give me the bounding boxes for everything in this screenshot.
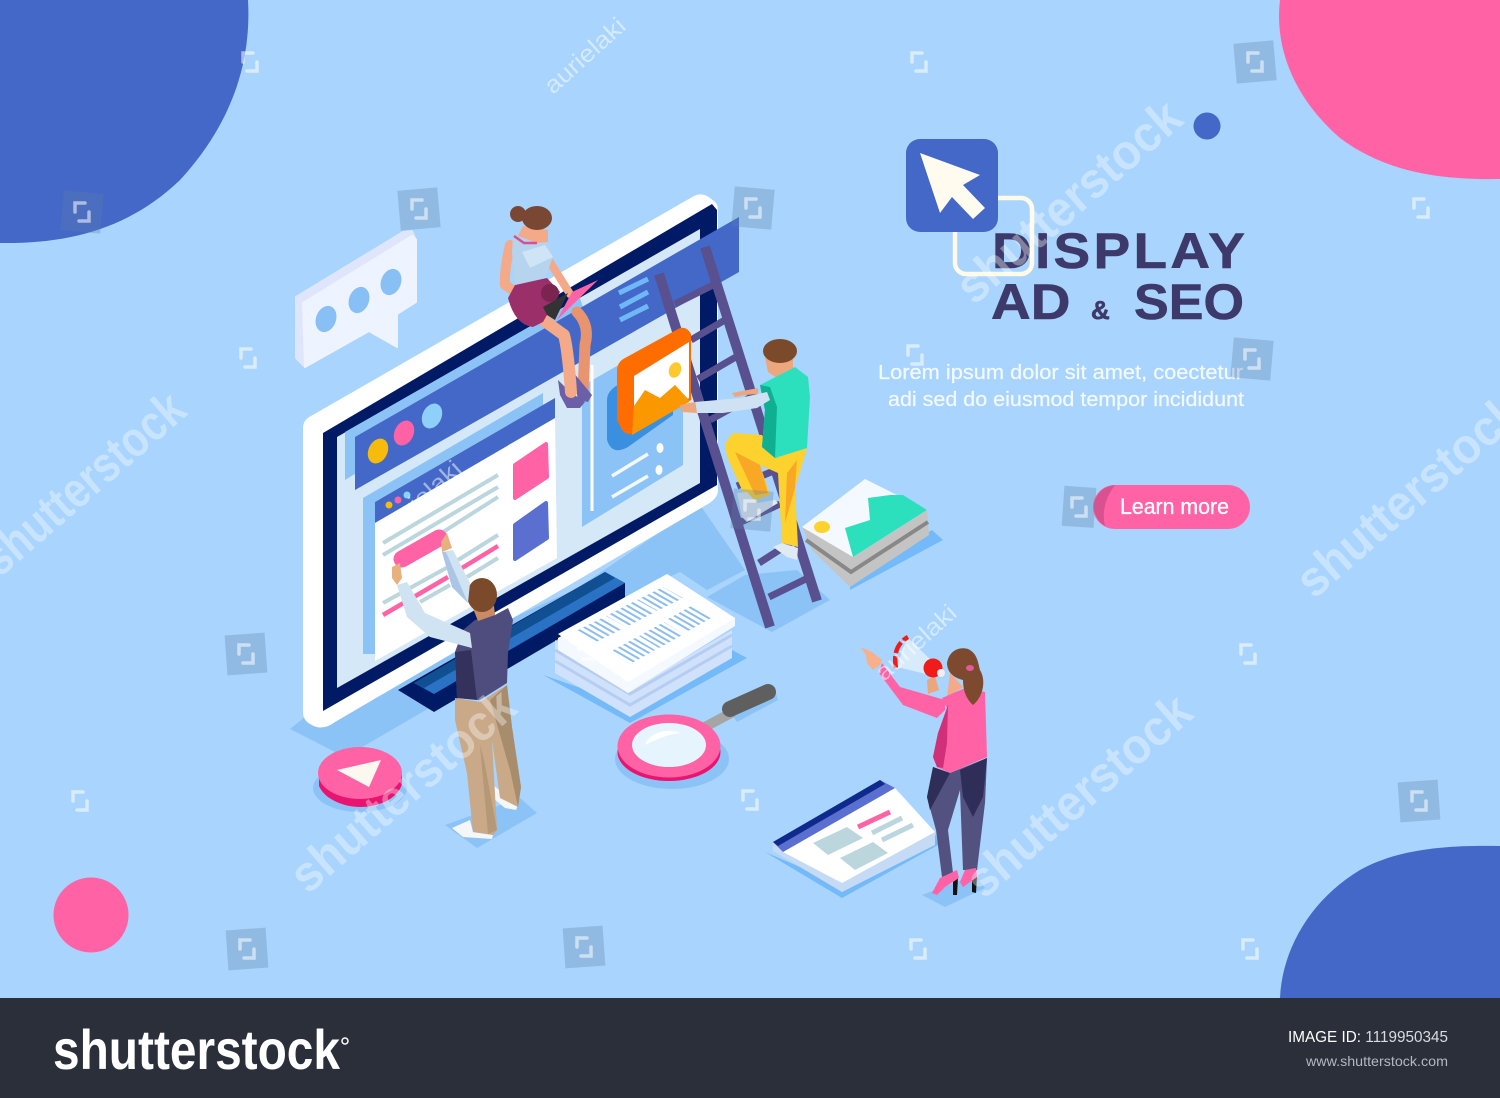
watermark text: aurielaki xyxy=(375,455,467,542)
vest xyxy=(455,608,513,700)
pink tile xyxy=(515,444,547,498)
dot: pink circle xyxy=(54,878,128,952)
arms xyxy=(397,582,472,648)
watermark text: aurielaki xyxy=(870,599,962,686)
figure: woman with megaphone xyxy=(860,637,987,895)
watermark text: shutterstock xyxy=(954,682,1203,908)
button: learn more: Learn more xyxy=(1120,494,1229,519)
title: AD xyxy=(991,274,1070,330)
monitor xyxy=(303,194,739,728)
side panel xyxy=(582,328,683,527)
trousers xyxy=(725,433,807,547)
outline square xyxy=(955,198,1032,274)
back leg xyxy=(577,312,586,392)
floor shadows xyxy=(290,505,985,907)
document stack xyxy=(555,574,735,717)
blue square xyxy=(906,139,998,232)
icon: cursor tile xyxy=(906,139,1032,274)
title xyxy=(991,223,1245,330)
jacket xyxy=(933,688,987,773)
image sun xyxy=(814,521,830,533)
footer bar xyxy=(0,998,1500,1098)
blue tile xyxy=(515,503,547,559)
shoes xyxy=(737,492,778,522)
skirt xyxy=(508,278,560,327)
neck xyxy=(472,606,495,621)
blob: bottom right xyxy=(1280,846,1500,998)
ladder xyxy=(659,247,817,627)
monitor stand xyxy=(398,572,625,712)
hands xyxy=(680,402,697,413)
top xyxy=(512,237,553,285)
hand xyxy=(860,647,882,670)
figure: woman on monitor xyxy=(505,206,598,408)
monitor bezel xyxy=(303,194,718,728)
paragraph xyxy=(878,362,1244,411)
image stack xyxy=(802,479,929,587)
hands xyxy=(392,563,402,585)
button: learn more xyxy=(1093,485,1250,529)
title: SEO xyxy=(1134,274,1244,330)
back arm xyxy=(505,245,546,312)
image id: IMAGE ID: 1119950345 xyxy=(1288,1029,1448,1046)
hair xyxy=(947,648,983,705)
blob: top right xyxy=(1279,0,1500,179)
watermark corner marks xyxy=(73,53,1428,958)
paragraph: adi sed do eiusmod tempor incididunt xyxy=(888,389,1244,411)
heels xyxy=(953,878,958,895)
trousers xyxy=(455,685,521,835)
icon: orange picture tile xyxy=(617,328,691,435)
icon: speech bubble xyxy=(296,231,416,367)
header menu lines xyxy=(617,279,655,346)
blob: top left xyxy=(0,0,248,243)
shoes xyxy=(573,372,592,402)
front leg xyxy=(530,310,571,392)
title: & xyxy=(1091,295,1110,325)
watermark squares xyxy=(60,40,1440,970)
arm xyxy=(695,392,770,413)
watermark text: aurielaki xyxy=(539,12,631,99)
arm xyxy=(879,663,945,718)
cursor arrow xyxy=(920,153,985,219)
megaphone xyxy=(895,637,945,694)
paragraph: Lorem ipsum dolor sit amet, coectetur xyxy=(878,362,1243,384)
hair xyxy=(510,206,552,230)
hair xyxy=(763,339,797,363)
watermark text: shutterstock xyxy=(278,677,527,903)
registered mark xyxy=(342,1038,348,1044)
image hills xyxy=(845,495,927,557)
article panel xyxy=(363,393,557,661)
shoes xyxy=(932,870,959,895)
scrunchie xyxy=(966,665,974,671)
magnifying glass xyxy=(618,692,768,781)
head xyxy=(467,578,497,612)
dot: blue circle xyxy=(1194,112,1220,140)
document text lines xyxy=(576,587,713,664)
site url: www.shutterstock.com xyxy=(1305,1053,1448,1069)
footer logo: shutterstock xyxy=(53,1018,341,1081)
monitor screen xyxy=(337,229,700,688)
laptop xyxy=(557,280,598,320)
neck xyxy=(947,673,963,697)
watermark text: shutterstock xyxy=(944,88,1193,314)
icon: play button xyxy=(318,747,402,807)
window dots xyxy=(364,400,446,467)
legs xyxy=(927,758,987,877)
figure: man on ladder xyxy=(680,339,810,560)
printed page xyxy=(773,780,935,892)
near arm xyxy=(550,262,570,294)
screen header band xyxy=(355,217,739,490)
collar xyxy=(514,236,537,243)
pink pill xyxy=(402,538,439,559)
shoes xyxy=(493,785,518,810)
neck xyxy=(518,226,548,243)
face xyxy=(765,355,793,380)
figure: man at screen xyxy=(392,533,521,839)
shirt xyxy=(760,367,810,458)
title: DISPLAY xyxy=(992,223,1245,279)
